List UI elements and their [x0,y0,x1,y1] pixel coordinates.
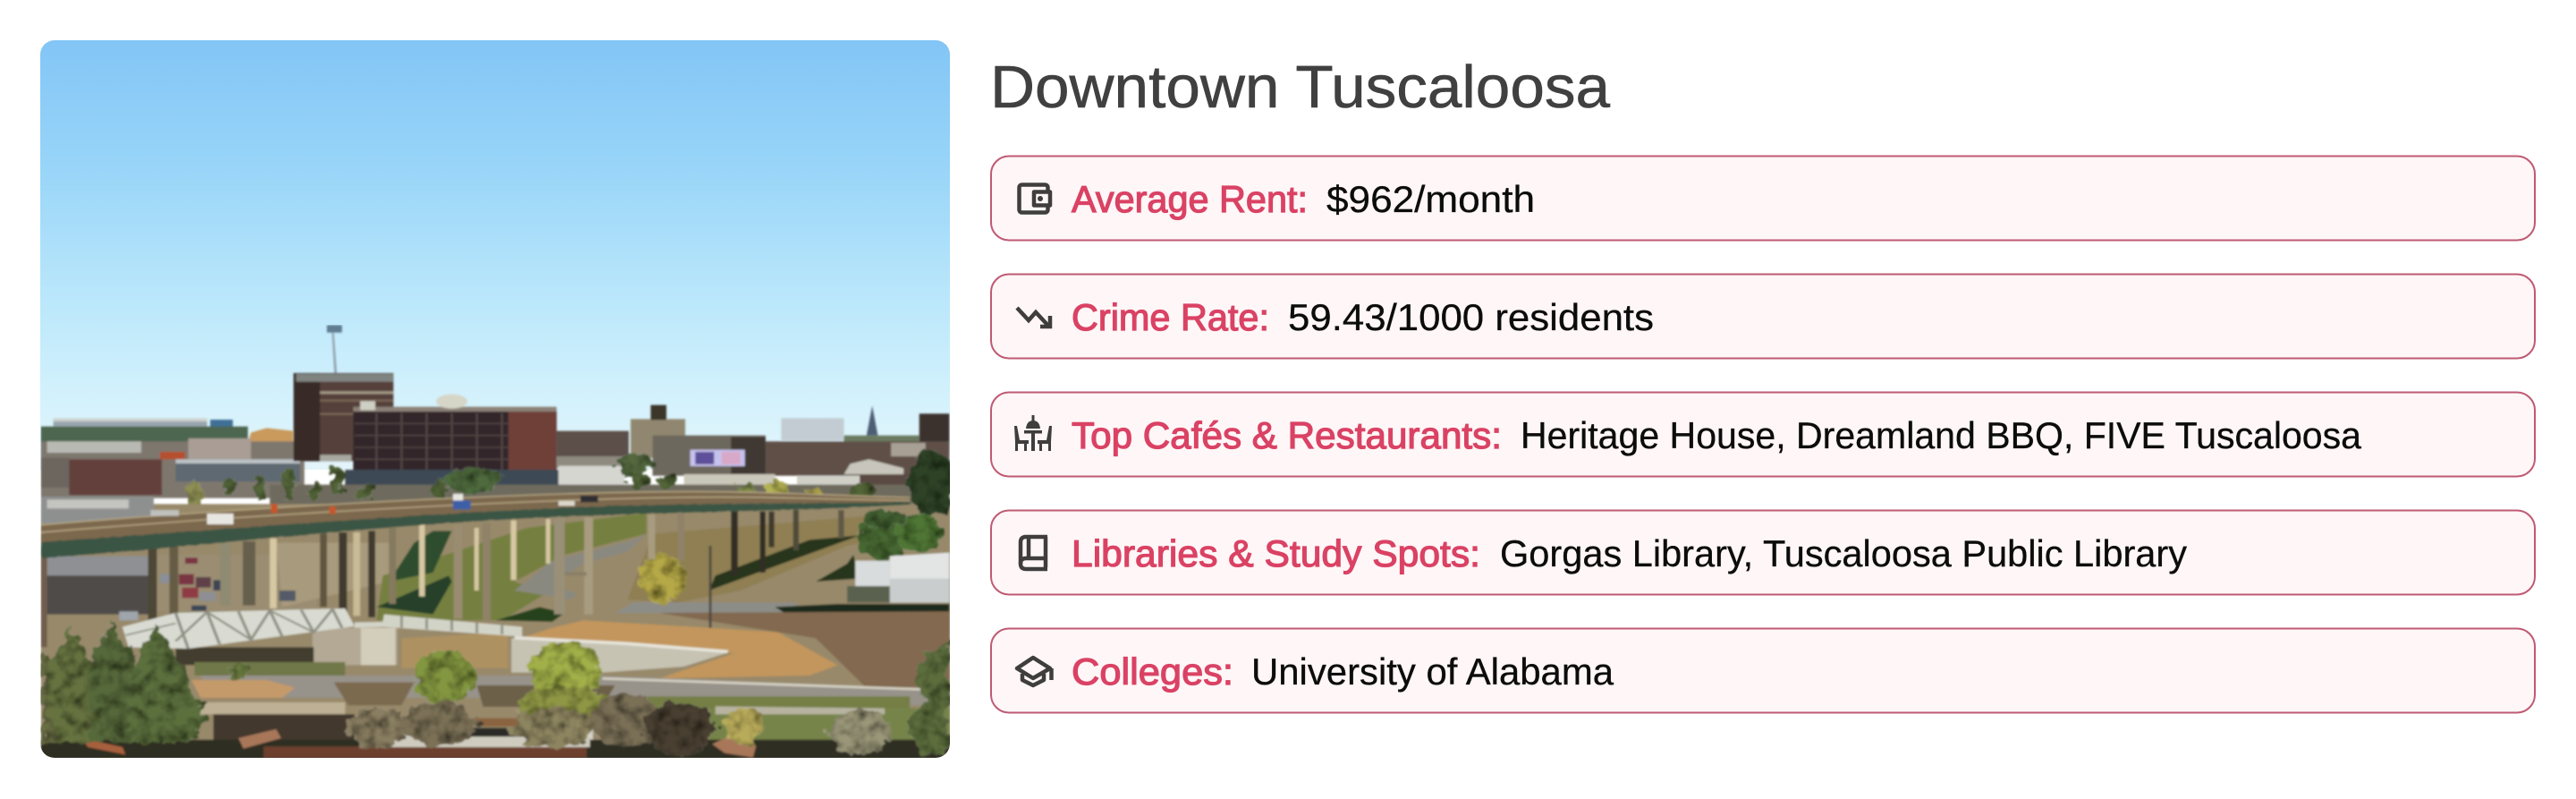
ground under highway [41,497,951,761]
white pedestrian bridges [123,608,522,649]
downtown buildings [41,373,949,506]
card: cafes and restaurants [991,392,2535,476]
road and lawn [41,676,951,759]
icon: wallet [1020,184,1050,213]
label: Libraries & Study Spots: [1072,532,1480,574]
card: libraries and study spots [991,510,2535,594]
orange mulch and walkways [175,620,838,678]
value: Heritage House, Dreamland BBQ, FIVE Tuscaloosa [1521,414,2362,456]
title: Downtown Tuscaloosa [990,54,1611,121]
label: Crime Rate: [1072,296,1269,338]
distant skyline [41,325,949,451]
photo scene [41,325,957,761]
foreground trees [41,620,949,756]
parked cars [119,557,295,620]
value: $962/month [1326,178,1535,220]
label: Top Cafés & Restaurants: [1072,414,1502,456]
card: colleges [991,628,2535,712]
label: Colleges: [1072,650,1233,693]
value: University of Alabama [1251,650,1614,693]
right background trees and building [640,450,957,687]
card: crime rate [991,274,2535,358]
icon: trend down [1017,308,1050,327]
card: average rent [991,156,2535,240]
icon: graduation cap [1017,658,1052,685]
label: Average Rent: [1072,178,1308,220]
highway [41,491,910,620]
sky [40,40,950,470]
icon: dining table [1014,415,1052,451]
photo: downtown skyline with elevated highway [40,40,957,761]
value: Gorgas Library, Tuscaloosa Public Library [1500,532,2187,574]
roadside trees [183,454,922,506]
icon: book [1021,537,1047,569]
value: 59.43/1000 residents [1288,296,1654,338]
